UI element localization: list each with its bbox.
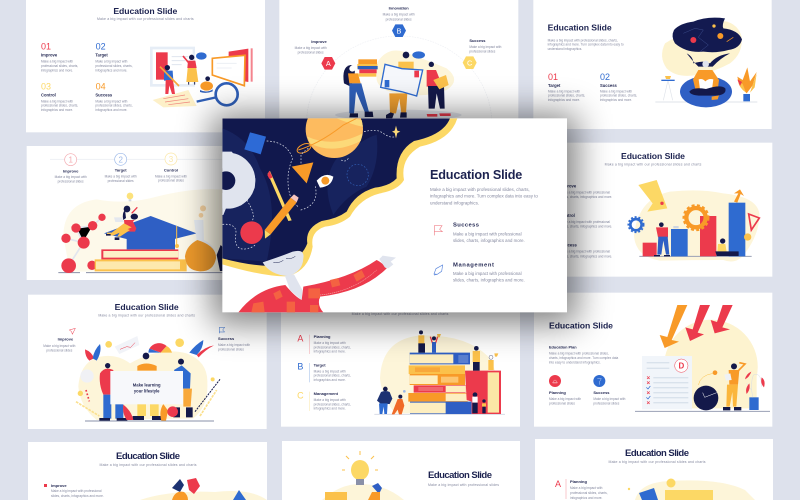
item A: Planning: Planning — [570, 479, 587, 484]
item 01: Make a big impact with — [548, 89, 580, 93]
goal 04: Make a big impact with — [95, 99, 128, 103]
goal 01: 01 — [41, 42, 51, 52]
heading: Education Slide — [116, 451, 180, 462]
item A: Planning: infographics and more. — [314, 350, 346, 354]
step C: Success: Success — [469, 38, 486, 43]
heading: Education Slide — [113, 6, 178, 16]
item: Success: Make a big impact with — [593, 397, 626, 401]
body: Education Plan: into easy to understand infographics. — [549, 360, 601, 364]
dark night sky hair — [222, 118, 450, 266]
red circle — [240, 221, 263, 244]
goal 02: professional slides, charts, — [95, 64, 133, 68]
heading: Education Slide — [430, 168, 522, 182]
goal 01 — [41, 42, 78, 72]
item 01 — [548, 72, 585, 102]
item: Improve — [44, 483, 104, 498]
step A: Improve: Improve — [311, 39, 328, 44]
item A: Planning: infographics and more. — [570, 496, 603, 500]
item: Improve — [560, 183, 612, 199]
item: Improve — [43, 328, 76, 352]
arrow orange — [660, 305, 687, 348]
triangle — [292, 162, 313, 183]
step 1: Improve — [63, 168, 79, 173]
item: Management: slides, charts, infographics and more. — [453, 278, 525, 283]
item: Planning: Make a big impact with — [549, 397, 581, 401]
item: Success — [453, 223, 525, 243]
item C: Management: professional slides, charts, — [314, 402, 351, 406]
red jumper with raised arm — [238, 260, 387, 312]
goal 01: Make a big impact with — [41, 60, 73, 64]
illustration: stack of books with people — [374, 330, 505, 414]
goal 03 — [41, 81, 78, 112]
illustration: light bulb and desk — [322, 451, 404, 500]
step B: Innovation: B — [397, 26, 402, 35]
body text: infographics and more. Turn complex data into easy to — [548, 43, 624, 47]
step C: Success: C — [467, 58, 473, 67]
body text: understand infographics. — [548, 47, 582, 51]
item: Improve: Make a big impact with professional — [51, 489, 102, 493]
item 01: professional slides, charts, — [548, 94, 585, 98]
icon: rocket — [434, 265, 443, 275]
intro text: Make a big impact with professional slides, charts, — [430, 187, 530, 192]
step A: Improve: Make a big impact with — [295, 46, 327, 50]
goal 04: Success — [95, 92, 113, 97]
step 2: 2 — [118, 155, 123, 164]
panel: slide bar chart progress — [533, 143, 772, 277]
item: Success: Success — [560, 242, 578, 247]
body: Education Plan: Education Plan — [549, 346, 577, 350]
item B: Target: Make a big impact with — [314, 369, 346, 373]
goal 04 — [95, 81, 133, 112]
item: Management: Management — [453, 262, 494, 268]
item C: Management — [297, 390, 351, 411]
subheading: Make a big impact with our professional slides and charts — [98, 313, 195, 317]
step 1 — [55, 154, 87, 183]
item: Improve: slides, charts, infographics and more. — [560, 195, 612, 199]
sign: your lifestyle — [134, 388, 160, 393]
icon: flag — [434, 226, 442, 235]
item: Control: Make a big impact with professional — [560, 220, 610, 224]
step 1: professional slides — [58, 179, 84, 183]
panel: slide hexagon steps — [279, 0, 518, 120]
illustration: reader with night sky thoughts — [655, 18, 757, 107]
illustration: students holding a sign — [76, 336, 220, 421]
step B: Innovation — [383, 6, 415, 37]
item: Success: slides, charts, infographics and more. — [453, 238, 525, 243]
goal 03: Make a big impact with — [41, 99, 73, 103]
item: Improve: slides, charts, infographics and more. — [51, 494, 104, 498]
illustration: report card, bomb clock, arrows — [635, 305, 770, 411]
item: Management: Make a big impact with professional — [453, 271, 522, 276]
item: Improve: Make a big impact with — [43, 344, 76, 348]
panel: slide numbered path with graduation cap — [27, 146, 266, 280]
step 1: Make a big impact with — [55, 175, 87, 179]
item: Management — [453, 262, 525, 283]
subheading: Make a big impact with our professional slides and charts — [605, 162, 702, 166]
illustration: books and coin — [628, 478, 755, 500]
step C: Success — [463, 38, 502, 69]
goal 02 — [95, 42, 133, 72]
goal 01: professional slides, charts, — [41, 64, 78, 68]
step C: Success: Make a big impact with — [469, 45, 502, 49]
panel: slide education plan with grade — [534, 293, 772, 427]
item B: Target: Target — [314, 362, 326, 367]
panel: slide four goals — [26, 0, 265, 132]
item: Success: Success — [218, 336, 235, 341]
intro text: infographics and more. Turn complex data into easy to — [430, 194, 538, 199]
panel: main slide — [222, 118, 567, 312]
sparkle — [392, 126, 400, 138]
item: Success: slides, charts, infographics and more. — [560, 254, 612, 258]
item: Success — [560, 242, 612, 258]
item: Planning: professional slides — [549, 401, 575, 405]
heading: Education Slide — [625, 448, 689, 459]
item: Improve: Make a big impact with professional — [560, 190, 610, 194]
arrow red — [685, 305, 710, 341]
face — [263, 251, 304, 276]
step 3: 3 — [169, 155, 174, 164]
item 02: 02 — [600, 72, 610, 82]
subheading: Make a big impact with our professional slides and charts — [97, 17, 194, 21]
subheading: Make a big impact with professional slides — [428, 483, 499, 487]
body text: Make a big impact with professional slides, charts, — [548, 38, 618, 42]
item: Success: professional slides — [593, 401, 620, 405]
item: Success — [218, 327, 250, 351]
item C: Management: Management — [314, 391, 339, 396]
heading: Education Slide — [621, 151, 685, 161]
heading: Education Slide — [428, 470, 492, 481]
item: Improve: professional slides — [46, 348, 73, 352]
item: Control: Control — [560, 213, 575, 218]
goal 04: infographics and more. — [95, 108, 128, 112]
subheading: Make a big impact with our professional slides and charts — [352, 312, 449, 316]
subheading: Make a big impact with our professional slides and charts — [100, 463, 197, 467]
step 2: professional slides — [108, 179, 134, 183]
sign: Make learning — [133, 383, 161, 388]
neck — [285, 274, 302, 300]
orange pencil — [265, 194, 299, 239]
step 2: Make a big impact with — [105, 175, 137, 179]
panel: slide make learning your lifestyle — [28, 295, 267, 429]
item 01: 01 — [548, 72, 558, 82]
item A: Planning: professional slides, charts, — [570, 491, 608, 495]
step B: Innovation: Make a big impact with — [383, 13, 415, 17]
goal 01: infographics and more. — [41, 68, 73, 72]
body: Education Plan — [549, 346, 619, 364]
item 02: infographics and more. — [600, 98, 632, 102]
shadow behind main slide — [212, 114, 577, 324]
step C: Success: professional slides — [469, 50, 496, 54]
goal 02: Target — [95, 53, 108, 58]
item: Success: Make a big impact with — [218, 343, 250, 347]
item B: Target: infographics and more. — [314, 378, 346, 382]
item: Success: Success — [453, 223, 479, 229]
goal 01: Improve — [41, 53, 58, 58]
item B: Target — [297, 362, 351, 382]
illustration: report card, bomb clock, arrows: D — [678, 362, 684, 371]
item 02 — [600, 72, 637, 102]
panel: slide planning books — [281, 290, 520, 427]
goal 04: 04 — [96, 81, 106, 91]
item C: Management: Make a big impact with — [314, 398, 346, 402]
dashed circle — [347, 164, 368, 186]
item A: Planning: A — [555, 479, 561, 489]
item: Success — [593, 375, 626, 405]
item: Success: professional slides — [218, 347, 244, 351]
step A: Improve: professional slides — [298, 50, 324, 54]
panel: bottom middle slide — [282, 441, 520, 500]
step 3: professional slides — [158, 179, 184, 183]
planet — [296, 118, 363, 158]
arrow red right — [711, 305, 733, 333]
step 1: 1 — [68, 156, 73, 165]
goal 02: 02 — [96, 42, 106, 52]
item C: Management: infographics and more. — [314, 407, 346, 411]
panel: bottom left slide — [28, 442, 267, 500]
panel: bottom right slide — [535, 439, 773, 500]
blue square — [244, 132, 266, 154]
item 01: infographics and more. — [548, 98, 580, 102]
illustration: classroom board and students — [150, 47, 253, 107]
goal 04: professional slides, charts, — [95, 104, 133, 108]
item 02: professional slides, charts, — [600, 94, 637, 98]
item: Success: Success — [593, 390, 610, 395]
heading: Education Slide — [548, 23, 612, 33]
goal 03: 03 — [41, 81, 51, 91]
item C: Management: C — [297, 390, 304, 400]
item A: Planning: Planning — [314, 334, 331, 339]
goal 03: infographics and more. — [41, 108, 73, 112]
item 02: Make a big impact with — [600, 89, 632, 93]
item 02: Success — [600, 83, 618, 88]
item: Success: Make a big impact with professional — [453, 232, 522, 237]
step 3 — [155, 153, 187, 183]
step B: Innovation: professional slides — [386, 17, 412, 21]
hand — [379, 256, 396, 268]
body: Education Plan: charts, infographics and more. Turn complex data — [549, 356, 619, 360]
item: Success: Make a big impact with professional — [560, 250, 610, 254]
heading: Education Slide — [549, 321, 613, 331]
step 3: Control — [164, 167, 178, 172]
item: Improve: Improve — [51, 483, 67, 488]
item B: Target: B — [297, 362, 303, 372]
item: Control: slides, charts, infographics and more. — [560, 225, 612, 229]
goal 02: Make a big impact with — [95, 60, 128, 64]
body: Education Plan: Make a big impact with professional slides, — [549, 352, 609, 356]
step 2: Target — [115, 168, 127, 173]
illustration: figures and flask — [140, 478, 267, 500]
step B: Innovation: Innovation — [389, 6, 409, 11]
goal 03: professional slides, charts, — [41, 104, 78, 108]
intro text: understand infographics. — [430, 200, 479, 205]
item A: Planning: Make a big impact with — [314, 341, 346, 345]
illustration: bars, gears, scroll — [628, 180, 759, 261]
yellow hair edge — [222, 118, 457, 276]
item: Planning: Planning — [549, 390, 566, 395]
gear — [222, 152, 256, 215]
item B: Target: professional slides, charts, — [314, 374, 351, 378]
subheading: Make a big impact with our professional slides and charts — [608, 460, 706, 464]
item A: Planning: professional slides, charts, — [314, 345, 351, 349]
item A: Planning: Make a big impact with — [570, 486, 603, 490]
step A: Improve: A — [326, 59, 331, 68]
item A: Planning — [297, 333, 351, 354]
step 3: Make a big impact with — [155, 174, 187, 178]
sign — [110, 371, 183, 404]
goal 03: Control — [41, 92, 56, 97]
item A: Planning — [555, 479, 608, 500]
pencil with red tip — [267, 171, 292, 221]
eye — [317, 175, 333, 188]
item A: Planning: A — [297, 333, 303, 343]
step A: Improve — [295, 39, 335, 70]
item: Improve: Improve — [58, 337, 74, 342]
item: Control — [560, 213, 612, 229]
heading: Education Slide — [115, 302, 179, 312]
goal 02: infographics and more. — [95, 68, 128, 72]
item: Improve: Improve — [560, 183, 577, 188]
panel: slide reading mind — [533, 0, 772, 129]
illustration: cap, books and flask — [58, 189, 227, 273]
illustration: students with books — [335, 51, 462, 120]
item 01: Target — [548, 83, 561, 88]
step 2 — [105, 153, 137, 183]
dashed paths — [222, 130, 395, 249]
item: Planning — [549, 375, 581, 405]
